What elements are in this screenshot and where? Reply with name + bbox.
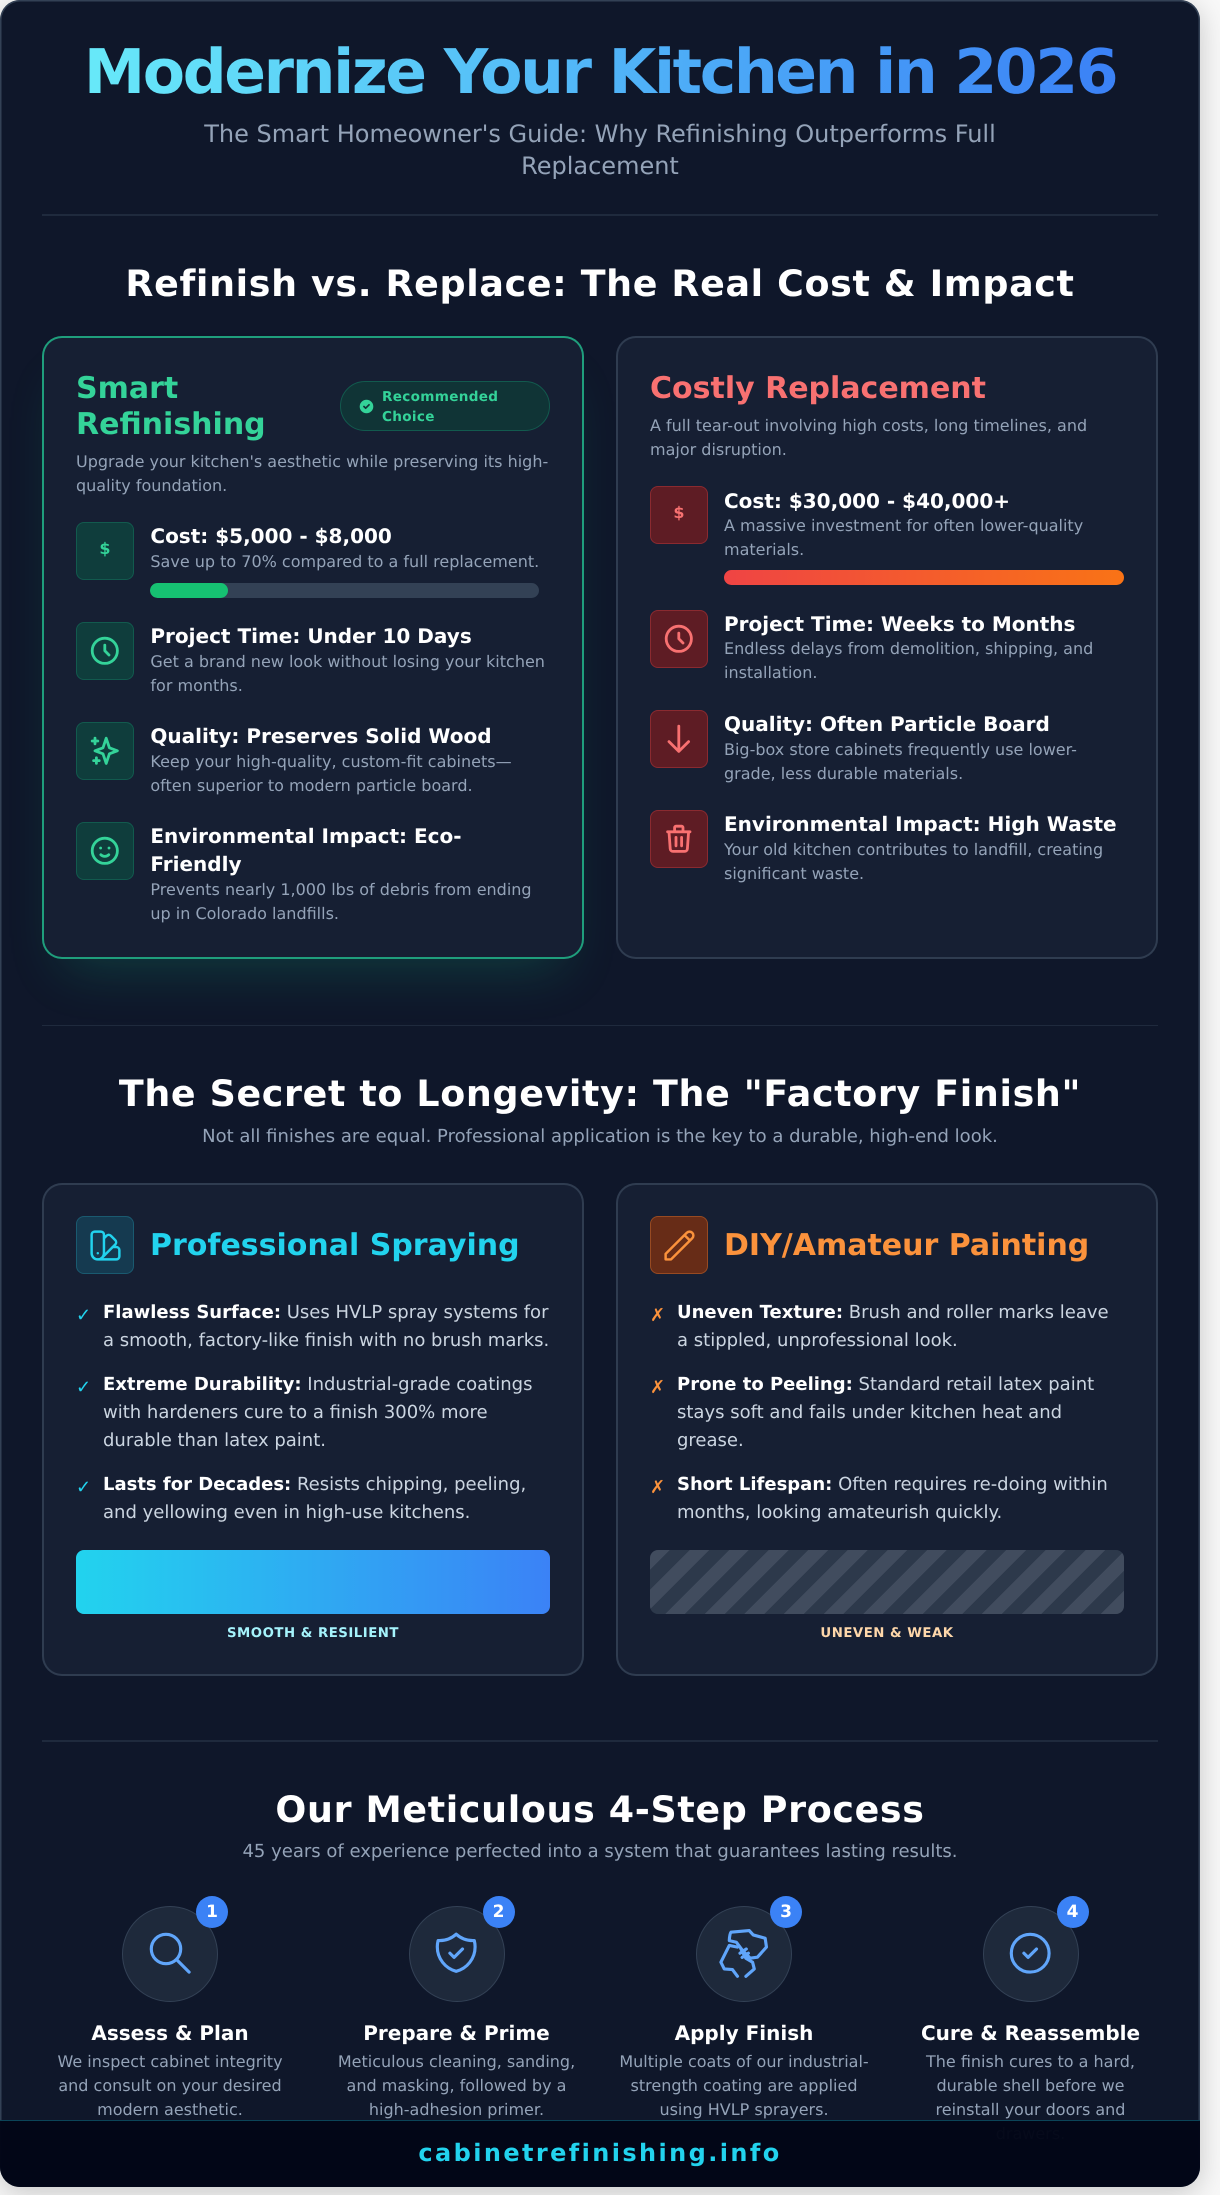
panel: costly replacement [616, 336, 1158, 959]
step 1: and consult on your desired [58, 2076, 282, 2095]
item: cost: materials. [724, 540, 804, 559]
item: quality: grade, less durable materials. [724, 764, 963, 782]
panel heading: Professional Spraying [150, 1228, 520, 1263]
panel: smart refinishing [42, 336, 584, 959]
step 4 [921, 1896, 1140, 2143]
step 3: Multiple coats of our industrial- [619, 2052, 869, 2071]
feature: lasts for decades: and yellowing even in high-use kitchens. [103, 1502, 470, 1523]
item: cost [650, 486, 1124, 585]
feature: flawless surface [76, 1302, 549, 1351]
item: quality [650, 710, 1077, 782]
item: environmental impact: Environmental Impact: High Waste [724, 812, 1117, 836]
icon: clock [650, 610, 708, 668]
panel: professional spraying: ✓ [76, 1305, 91, 1326]
item: environmental impact: Environmental Impact: Eco- [150, 824, 462, 848]
drawback: prone to peeling: stays soft and fails under kitchen heat and [677, 1402, 1062, 1423]
step 1: modern aesthetic. [97, 2100, 243, 2119]
icon: arrow down [650, 710, 708, 768]
drawback: uneven texture [650, 1302, 1109, 1351]
item: project time: Project Time: Under 10 Days [150, 624, 472, 648]
icon: dollar [650, 486, 708, 544]
feature: extreme durability: with hardeners cure to a finish 300% more [103, 1402, 488, 1423]
feature: extreme durability [76, 1374, 532, 1451]
item: quality [76, 722, 512, 794]
subtitle [204, 120, 996, 180]
feature: extreme durability: Extreme Durability: Industrial-grade coatings [103, 1374, 532, 1395]
item: cost [76, 522, 539, 598]
panel heading [76, 371, 266, 442]
feature: extreme durability: durable than latex paint. [103, 1430, 326, 1451]
icon: clock [76, 622, 134, 680]
step 3: Apply Finish [675, 2021, 813, 2045]
step 3 [619, 1896, 869, 2119]
step 4: Cure & Reassemble [921, 2021, 1140, 2045]
item: project time: Endless delays from demolition, shipping, and [724, 639, 1093, 658]
panel description: major disruption. [650, 440, 787, 459]
drawback: short lifespan: months, looking amateurish quickly. [677, 1502, 1002, 1523]
feature: lasts for decades [76, 1474, 526, 1523]
step 4: The finish cures to a hard, [926, 2052, 1135, 2071]
item: quality: Keep your high-quality, custom-fit cabinets— [150, 752, 512, 770]
icon: check circle [982, 1906, 1078, 2002]
item: environmental impact: up in Colorado landfills. [150, 904, 339, 922]
panel heading: Refinishing [76, 407, 266, 442]
item: environmental impact: Prevents nearly 1,000 lbs of debris from ending [150, 880, 532, 898]
section subtitle: Not all finishes are equal. Professional application is the key to a durable, high-end look. [202, 1126, 998, 1147]
panel heading: Smart [76, 371, 178, 406]
drawback: short lifespan: Short Lifespan: Often requires re-doing within [677, 1474, 1108, 1495]
panel: diy painting [616, 1183, 1158, 1676]
panel description [76, 452, 548, 495]
panel: professional spraying [42, 1183, 584, 1676]
item: cost: Cost: $5,000 - $8,000 [150, 524, 392, 548]
drawback: prone to peeling: Prone to Peeling: Standard retail latex paint [677, 1374, 1094, 1395]
item: cost: Cost: $30,000 - $40,000+ [724, 489, 1010, 513]
drawback: short lifespan [650, 1474, 1108, 1523]
step 1: Assess & Plan [91, 2021, 249, 2045]
smooth finish swatch [76, 1550, 550, 1614]
drawback: prone to peeling: grease. [677, 1430, 744, 1451]
step 2: and masking, followed by a [347, 2076, 566, 2095]
icon: smile [76, 822, 134, 880]
cost bar [724, 570, 1124, 585]
item: environmental impact: Friendly [150, 852, 242, 876]
icon: swatch [76, 1216, 134, 1274]
uneven finish swatch [650, 1550, 1124, 1614]
subtitle: The Smart Homeowner's Guide: Why Refinishing Outperforms Full [204, 120, 996, 148]
step 2: Meticulous cleaning, sanding, [338, 2052, 575, 2071]
badge: recommended choice: Recommended [382, 389, 498, 405]
cost bar [150, 582, 539, 598]
badge: recommended choice [340, 381, 550, 431]
panel description: quality foundation. [76, 476, 227, 495]
step 3: using HVLP sprayers. [659, 2100, 829, 2119]
icon: dollar: $ [99, 539, 111, 558]
panel: diy painting: ✗ [650, 1305, 665, 1326]
step 3: strength coating are applied [631, 2076, 857, 2095]
icon: hands [696, 1906, 792, 2002]
item: quality: Quality: Preserves Solid Wood [150, 724, 492, 748]
item: quality: Big-box store cabinets frequently use lower- [724, 740, 1077, 758]
heading: factory finish: The Secret to Longevity: The "Factory Finish" [119, 1072, 1081, 1115]
item: environmental impact: significant waste. [724, 864, 864, 882]
step 2: Prepare & Prime [363, 2021, 550, 2045]
icon: pencil [650, 1216, 708, 1274]
icon: sparkles [76, 722, 134, 780]
section subtitle: 45 years of experience perfected into a system that guarantees lasting results. [242, 1841, 958, 1862]
icon: shield [408, 1906, 504, 2002]
item: project time: installation. [724, 663, 817, 682]
panel heading: DIY/Amateur Painting [724, 1228, 1089, 1263]
drawback: uneven texture: Uneven Texture: Brush and roller marks leave [677, 1302, 1109, 1323]
heading: refinish vs replace: Refinish vs. Replace: The Real Cost & Impact [125, 262, 1075, 305]
step 4: 4 [1067, 1902, 1078, 1922]
icon: dollar: $ [673, 503, 685, 522]
item: cost: A massive investment for often lower-quality [724, 516, 1083, 535]
panel: professional spraying: ✓ [76, 1477, 91, 1498]
step 3: 3 [780, 1902, 792, 1922]
title: Modernize Your Kitchen in 2026 [84, 36, 1116, 108]
step 1: We inspect cabinet integrity [57, 2052, 283, 2071]
panel description [650, 416, 1087, 459]
step 4: drawers. [996, 2124, 1065, 2143]
panel description: Upgrade your kitchen's aesthetic while preserving its high- [76, 452, 548, 471]
item: project time [76, 622, 545, 694]
subtitle: Replacement [521, 152, 679, 180]
item: cost: Save up to 70% compared to a full replacement. [150, 552, 539, 570]
item: quality: Quality: Often Particle Board [724, 712, 1050, 736]
icon: trash [650, 810, 708, 868]
step 4: reinstall your doors and [936, 2100, 1125, 2119]
icon: dollar [76, 522, 134, 580]
step 2: high-adhesion primer. [369, 2100, 544, 2119]
item: project time [650, 610, 1093, 682]
swatch label: SMOOTH & RESILIENT [227, 1626, 399, 1640]
panel: diy painting: ✗ [650, 1477, 665, 1498]
panel description: A full tear-out involving high costs, long timelines, and [650, 416, 1087, 435]
footer: cabinetrefinishing.info [418, 2139, 782, 2167]
item: quality: often superior to modern particle board. [150, 776, 473, 794]
icon: search [122, 1906, 218, 2002]
feature: flawless surface: a smooth, factory-like finish with no brush marks. [103, 1330, 549, 1351]
drawback: prone to peeling [650, 1374, 1094, 1451]
item: project time: for months. [150, 676, 243, 694]
feature: lasts for decades: Lasts for Decades: Resists chipping, peeling, [103, 1474, 526, 1495]
item: project time: Get a brand new look without losing your kitchen [150, 652, 545, 670]
item: environmental impact [650, 810, 1117, 882]
step 2 [338, 1896, 575, 2119]
swatch label: UNEVEN & WEAK [820, 1626, 954, 1640]
panel heading: Costly Replacement [650, 371, 986, 406]
feature: flawless surface: Flawless Surface: Uses HVLP spray systems for [103, 1302, 548, 1323]
step 1 [57, 1896, 283, 2119]
item: environmental impact: Your old kitchen contributes to landfill, creating [724, 840, 1103, 858]
step 1: 1 [206, 1902, 218, 1922]
heading: process: Our Meticulous 4-Step Process [275, 1788, 925, 1831]
item: project time: Project Time: Weeks to Months [724, 612, 1075, 636]
footer [0, 2120, 1200, 2187]
drawback: uneven texture: a stippled, unprofessional look. [677, 1330, 958, 1351]
panel: professional spraying: ✓ [76, 1377, 91, 1398]
panel: diy painting: ✗ [650, 1377, 665, 1398]
item: environmental impact [76, 822, 532, 922]
step 2: 2 [493, 1902, 504, 1922]
badge: recommended choice: Choice [382, 409, 435, 425]
step 4: durable shell before we [936, 2076, 1124, 2095]
